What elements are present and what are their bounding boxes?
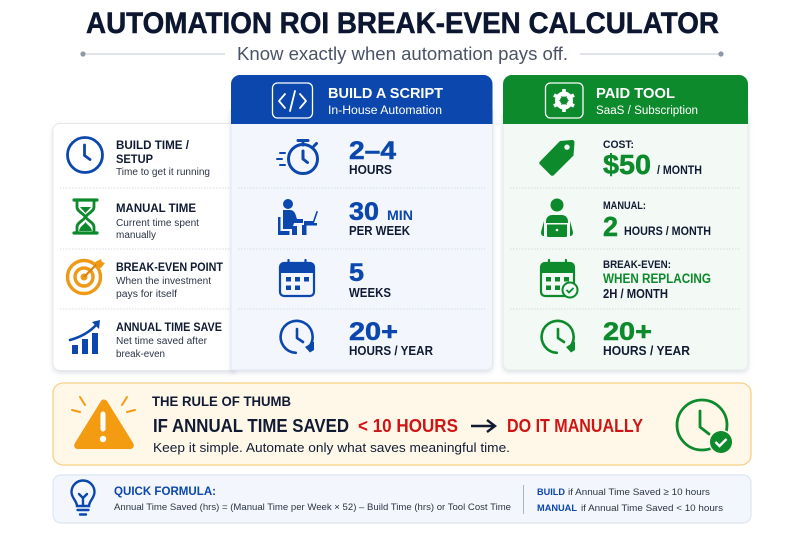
header: build a script: In-House Automation [328, 105, 442, 117]
title: AUTOMATION ROI BREAK-EVEN CALCULATOR [86, 7, 719, 40]
rule statement: IF ANNUAL TIME SAVED [153, 416, 349, 436]
metric: cost: $50 [603, 149, 651, 180]
row label: build time: Time to get it running [116, 167, 210, 178]
header: paid tool [503, 75, 748, 124]
metric: annual time saved [279, 318, 433, 358]
panel: row labels [53, 124, 235, 370]
icon: warning triangle [72, 397, 135, 449]
metric: annual hours: 20+ [603, 318, 652, 346]
manual decision: if Annual Time Saved < 10 hours [581, 503, 723, 514]
row label: break-even point [68, 259, 223, 300]
build decision: if Annual Time Saved ≥ 10 hours [568, 487, 710, 498]
header: build a script: BUILD A SCRIPT [328, 85, 443, 102]
icon: calendar with check [541, 260, 578, 298]
manual decision: MANUAL [537, 503, 577, 514]
icon: code [272, 83, 312, 118]
metric: annual hours: HOURS / YEAR [603, 344, 690, 358]
metric: cost: / MONTH [657, 163, 702, 177]
rule note: Keep it simple. Automate only what saves meaningful time. [153, 440, 510, 455]
row label: annual time save [70, 320, 222, 360]
row label: break-even point: pays for itself [116, 289, 177, 300]
metric: manual hours: MANUAL: [603, 200, 646, 212]
header: paid tool: PAID TOOL [596, 85, 675, 102]
subtitle: Know exactly when automation pays off. [237, 44, 568, 64]
panel: paid tool [503, 75, 748, 370]
panel: build a script [231, 75, 492, 370]
metric: break-even weeks: WEEKS [349, 286, 391, 300]
metric: manual hours: 2 [603, 211, 618, 242]
row label: break-even point: When the investment [116, 276, 211, 287]
rule statement: DO IT MANUALLY [507, 416, 643, 436]
icon: person with laptop [541, 198, 573, 237]
metric: build time: 2–4 [349, 137, 396, 165]
row label: build time: SETUP [116, 154, 153, 166]
panel: quick formula [53, 475, 751, 523]
metric: build time [277, 137, 396, 177]
rule heading: THE RULE OF THUMB [152, 394, 291, 409]
metric: manual time: PER WEEK [349, 224, 410, 238]
icon: person at laptop [278, 199, 318, 235]
rule statement: < 10 HOURS [358, 416, 458, 436]
row label: manual time: Current time spent [116, 218, 199, 229]
metric: build time: HOURS [349, 163, 392, 177]
metric: cost [539, 139, 702, 180]
metric: manual time: 30 [349, 198, 379, 226]
metric: break-even [541, 259, 711, 301]
build decision: BUILD [537, 487, 565, 498]
row label: annual time save: Net time saved after [116, 336, 208, 347]
metric: annual time saved: HOURS / YEAR [349, 344, 433, 358]
metric: cost: COST: [603, 139, 634, 151]
subtitle [80, 44, 724, 64]
icon: stopwatch [277, 140, 318, 174]
metric: manual hours [541, 198, 711, 242]
row label: build time: BUILD TIME / [116, 140, 190, 152]
icon: calendar [280, 260, 314, 296]
metric: annual hours [540, 318, 690, 358]
row label: manual time: manually [116, 230, 156, 241]
icon: clock with arrow [279, 319, 315, 355]
panel: rule of thumb [53, 383, 751, 465]
metric: manual hours: HOURS / MONTH [624, 224, 711, 238]
metric: annual time saved: 20+ [349, 318, 398, 346]
row label: break-even point: BREAK-EVEN POINT [116, 262, 223, 274]
metric: break-even: WHEN REPLACING [603, 271, 711, 286]
icon: clock with arrow [540, 319, 576, 355]
metric: break-even weeks [280, 259, 391, 300]
formula text: Annual Time Saved (hrs) = (Manual Time per Week × 52) – Build Time (hrs) or Tool Cost Time [114, 502, 511, 513]
row label: manual time: MANUAL TIME [116, 203, 196, 215]
row label: build time [68, 138, 210, 178]
metric: manual time [278, 198, 413, 238]
icon: light bulb [72, 481, 94, 514]
metric: manual time: MIN [387, 207, 413, 223]
header: paid tool: SaaS / Subscription [596, 105, 698, 117]
row label: annual time save: ANNUAL TIME SAVE [116, 322, 222, 334]
icon: price tag [539, 140, 574, 176]
metric: break-even weeks: 5 [349, 259, 364, 287]
icon: gear [546, 83, 583, 118]
rule statement [153, 416, 643, 436]
formula heading: QUICK FORMULA: [114, 484, 216, 498]
metric: break-even: 2H / MONTH [603, 287, 668, 301]
icon: clock with check [677, 400, 734, 454]
row label: annual time save: break-even [116, 349, 165, 360]
metric: break-even: BREAK-EVEN: [603, 259, 671, 271]
row label: manual time [74, 200, 199, 241]
header: build a script [231, 75, 492, 124]
